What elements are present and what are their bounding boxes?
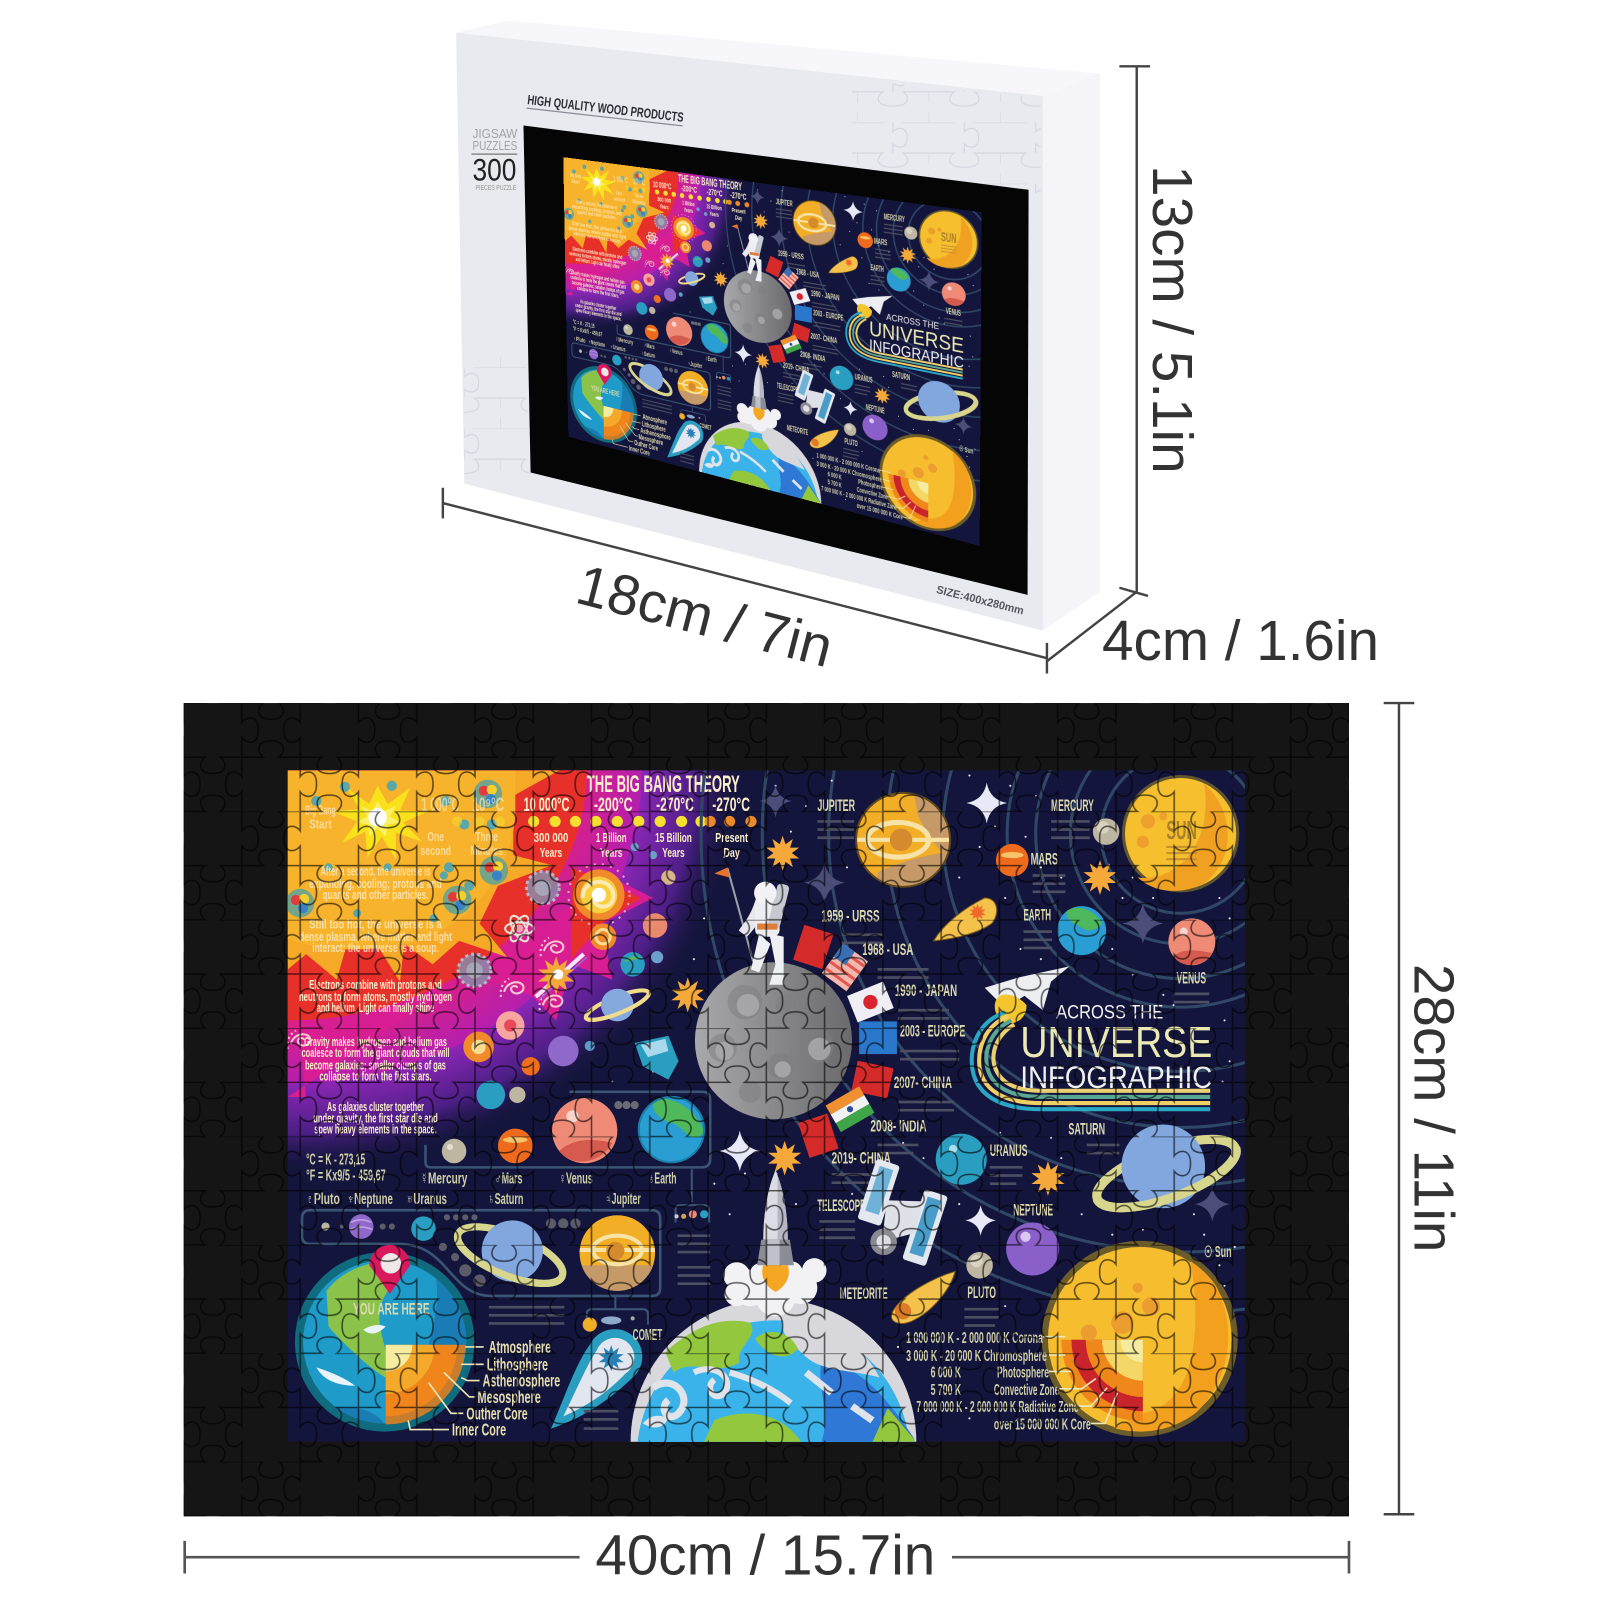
planet symbols legend: ♆Neptune	[347, 1191, 393, 1208]
sun with label	[1123, 777, 1238, 891]
planet: pluto small	[321, 1222, 330, 1231]
box piece count: PIECES PUZZLE	[476, 184, 517, 192]
temperatures row	[421, 794, 750, 816]
black picture panel on box	[523, 126, 1029, 595]
timeline labels: 1 Billion	[596, 830, 627, 845]
planet: saturn	[451, 1215, 570, 1295]
big bang explanatory text: spew heavy elements in the space.	[314, 1122, 437, 1137]
moon with craters	[695, 962, 852, 1119]
temperature conversion note: °C = K - 273,15	[306, 1151, 366, 1168]
temperatures row: -200°C	[594, 794, 633, 816]
dimension: box height	[1119, 66, 1203, 596]
timeline labels: Years	[600, 845, 622, 860]
atoms, nebulae and galaxies	[286, 780, 563, 1049]
big earth horizon	[631, 1299, 916, 1594]
meteor	[934, 898, 997, 941]
box front face	[456, 33, 1043, 631]
dimension: puzzle width: 40cm / 15.7in	[595, 1524, 935, 1587]
pluto with label: PLUTO	[967, 1284, 996, 1302]
icon: crystal asteroid	[635, 1036, 679, 1080]
timeline labels: Day	[723, 845, 740, 860]
sun symbol label: ☉ Sun	[1204, 1244, 1232, 1261]
venus with label: VENUS	[1177, 970, 1206, 988]
big bang explanatory text	[299, 864, 452, 1137]
asteroids	[614, 1101, 639, 1109]
sun layers labels: over 15 000 000 K Core	[994, 1417, 1091, 1434]
big bang explanatory text: After a second, the universe is	[320, 864, 431, 879]
dimension: puzzle width	[185, 1524, 1349, 1587]
space shuttle	[985, 966, 1069, 1023]
earth core cutaway	[386, 1345, 465, 1424]
box piece count: 300	[472, 152, 516, 188]
dimension: box depth	[1047, 592, 1379, 673]
planet: mars	[498, 1129, 533, 1163]
timeline labels: Three	[476, 829, 498, 844]
sun layers labels: 7 000 000 K - 2 000 000 K Radiative Zone	[916, 1399, 1079, 1416]
big bang explanatory text: coalesce to form the giant clouds that will	[302, 1045, 449, 1060]
planet: earth	[639, 1097, 704, 1162]
big bang explanatory text: dense plasma, where matter and light	[299, 929, 452, 944]
planet symbols legend: ☿Mercury	[420, 1171, 468, 1188]
moon mission labels	[821, 907, 965, 1183]
moon mission labels: 1959 - URSS	[821, 907, 880, 925]
supernova burst	[536, 954, 587, 1000]
timeline labels: One	[428, 829, 444, 844]
temperature and timeline heading	[305, 771, 757, 860]
dimension: puzzle height: 28cm / 11in	[1401, 964, 1464, 1252]
earth layers labels: Outher Core	[466, 1403, 528, 1423]
you are here earth	[295, 1245, 474, 1432]
comet	[551, 1327, 663, 1429]
product box	[456, 20, 1100, 631]
location pin	[369, 1245, 410, 1294]
flag: ussr	[793, 925, 833, 969]
earth layers labels: Mesosphere	[478, 1387, 541, 1407]
mars	[996, 844, 1065, 892]
sun layers labels: 3 000 K - 20 000 K Chromosphere	[906, 1348, 1047, 1365]
rocket launch	[723, 1170, 827, 1316]
timeline labels: Start	[309, 817, 332, 832]
sun layers labels	[906, 1330, 1117, 1434]
earth small with label: EARTH	[1023, 906, 1051, 924]
rainbow trail	[972, 1012, 1210, 1109]
timeline labels: Minutes	[470, 843, 503, 858]
moon mission labels: 2007- CHINA	[894, 1074, 952, 1092]
planet symbols legend: ♄Saturn	[488, 1191, 523, 1208]
planet symbols legend: ♃Jupiter	[605, 1191, 641, 1208]
box size note: SIZE:400x280mm	[935, 584, 1025, 617]
timeline labels: Years	[540, 845, 562, 860]
moon mission labels: 2003 - EUROPE	[900, 1023, 965, 1041]
meteorite with label: METEORITE	[840, 1285, 888, 1303]
temperatures row: 10 000°C	[523, 794, 569, 816]
poster artwork	[288, 157, 1245, 1442]
big bang explanatory text: expanding, cooling; protons and	[309, 876, 442, 891]
box piece count: JIGSAW	[472, 126, 518, 141]
planet: venus	[552, 1098, 617, 1163]
mars: MARS	[1031, 850, 1058, 868]
sun cutaway large	[1045, 1244, 1235, 1434]
box brand line: HIGH QUALITY WOOD PRODUCTS	[527, 92, 685, 125]
faint puzzle outlines on box	[464, 80, 1041, 482]
big bang explanatory text: interact: the universe is a soup.	[312, 940, 439, 955]
uranus with label	[936, 1134, 1028, 1185]
telescope satellite	[817, 1158, 953, 1266]
jupiter label: JUPITER	[817, 797, 855, 815]
box brand line	[527, 92, 685, 126]
small planets in the cosmic timeline	[477, 843, 676, 1109]
pluto with label	[964, 1252, 999, 1326]
earth layers labels: Lithosphere	[487, 1354, 548, 1374]
outer planets box	[302, 1169, 710, 1332]
sun layers labels: 1 000 000 K - 2 000 000 K Corona	[906, 1330, 1043, 1347]
meteorite with label	[840, 1271, 955, 1323]
temperatures row: -270°C	[712, 794, 750, 816]
orbit dots	[340, 1214, 581, 1287]
neptune with label	[1006, 1201, 1059, 1276]
smoke cloud	[723, 1258, 827, 1316]
saturn large with label	[1068, 1121, 1244, 1222]
earth layers labels: Atmosphere	[489, 1337, 551, 1357]
earth layers labels	[408, 1337, 560, 1440]
planet symbols legend: ♁Earth	[648, 1171, 677, 1188]
comet: COMET	[633, 1327, 663, 1344]
timeline labels: 300 000	[534, 830, 568, 845]
earth small with label	[1023, 906, 1106, 955]
planet symbols legend: ♅Uranus	[406, 1191, 447, 1208]
sun layers labels: 6 000 K	[931, 1365, 961, 1382]
timeline labels: Years	[662, 845, 685, 860]
jigsaw piece cut lines	[184, 703, 1349, 1516]
sun layers labels: 5 700 K	[931, 1382, 961, 1399]
jupiter label	[817, 797, 855, 838]
spiral galaxy	[463, 864, 630, 1062]
planet symbols legend: ♂Mars	[495, 1171, 522, 1188]
title: the big bang theory: THE BIG BANG THEORY	[587, 771, 740, 798]
box right face	[1043, 73, 1100, 631]
temperature conversion note: °F = Kx9/5 - 459,67	[306, 1168, 386, 1185]
flag: india	[826, 1086, 874, 1132]
assembled puzzle board	[184, 703, 1349, 1516]
box top face	[456, 20, 1100, 96]
panel: big bang expanding background	[288, 157, 736, 1160]
box piece count	[471, 126, 518, 192]
title line 1: ACROSS THE	[1056, 1001, 1163, 1023]
timeline dots	[452, 816, 757, 827]
big bang explanatory text: collapse to form the first stars.	[319, 1069, 432, 1084]
astronaut with flag	[714, 867, 790, 985]
telescope satellite: TELESCOPE	[817, 1197, 865, 1215]
dimension: box depth: 4cm / 1.6in	[1102, 610, 1379, 673]
moon mission labels: 1990 - JAPAN	[895, 982, 957, 1000]
moon mission labels: 1968 - USA	[862, 941, 913, 959]
planet: jupiter large	[855, 791, 954, 898]
title line 3: INFOGRAPHIC	[1020, 1059, 1212, 1095]
planet symbols legend	[306, 1171, 677, 1208]
moon mission labels: 2019- CHINA	[832, 1149, 891, 1167]
flag: china 2019	[798, 1114, 839, 1158]
sun with label: SUN	[1166, 817, 1197, 845]
text lines: saturn notes	[489, 1307, 564, 1323]
sun layers labels: Photosphere	[997, 1365, 1049, 1382]
big bang explanatory text: Still too hot, the universe is a	[309, 917, 442, 932]
timeline labels: second	[420, 843, 451, 858]
planet: mercury	[442, 1139, 466, 1163]
flag: japan	[847, 982, 894, 1023]
flag: china	[851, 1061, 894, 1098]
flags of space nations	[793, 925, 897, 1158]
asteroid belt bracket	[583, 1296, 648, 1332]
orange burst stars	[671, 836, 1117, 1196]
title: across the universe infographic	[972, 1001, 1212, 1109]
big bang explanatory text: As galaxies cluster together	[327, 1099, 424, 1114]
dimension: box height: 13cm / 5.1in	[1140, 165, 1203, 474]
dimension: puzzle height	[1384, 703, 1464, 1514]
timeline labels: Big Bang	[305, 802, 336, 817]
temperatures row: 1 000°C	[421, 794, 459, 816]
mercury: MERCURY	[1051, 797, 1094, 815]
planet: uranus small	[411, 1216, 436, 1241]
earth layers labels: Asthenosphere	[483, 1371, 560, 1391]
dimension: box width: 18cm / 7in	[570, 554, 839, 680]
planet symbols legend: ♇Pluto	[306, 1191, 340, 1208]
planet: neptune small	[349, 1214, 373, 1239]
temperatures row: -270°C	[656, 794, 694, 816]
box piece count: PUZZLES	[472, 138, 517, 153]
timeline labels: Present	[715, 830, 748, 845]
flag: europe	[859, 1021, 897, 1054]
big bang explanatory text: under gravity, the first star die and	[313, 1110, 438, 1125]
decorative four point stars	[719, 783, 1230, 1236]
sun layers labels: Convective Zone	[994, 1382, 1059, 1399]
big bang explanatory text: and helium. Light can finally shine	[317, 1000, 434, 1015]
orbit rings	[668, 178, 1245, 1312]
title line 2: UNIVERSE	[1020, 1018, 1212, 1067]
background stars	[612, 776, 1235, 1418]
temperature conversion note	[306, 1151, 386, 1185]
rocket flame	[762, 1265, 789, 1292]
neptune with label: NEPTUNE	[1013, 1201, 1053, 1219]
you are here label: YOU ARE HERE	[353, 1300, 430, 1318]
timeline labels	[305, 802, 748, 860]
uranus with label: URANUS	[990, 1142, 1028, 1160]
mercury	[1051, 797, 1119, 845]
saturn large with label: SATURN	[1068, 1121, 1105, 1139]
flag: usa	[822, 943, 868, 991]
earth layers labels: Inner Core	[452, 1420, 506, 1440]
mini poster printed on the box	[564, 157, 982, 546]
bracket to rocks	[674, 1169, 710, 1284]
inner planets box	[426, 1092, 710, 1167]
temperatures row: 10⁹°C	[472, 794, 504, 816]
big bang explanatory text: Electrons combine with protons and	[309, 977, 442, 992]
timeline labels: 15 Billion	[655, 830, 692, 845]
decorative particles	[311, 781, 497, 922]
dimension: box width	[443, 488, 1047, 680]
big bang explanatory text: quarks and other particles.	[322, 887, 429, 902]
big bang explanatory text: neutrons to form atoms, mostly hydrogen	[299, 989, 452, 1004]
planet symbols legend: ♀Venus	[559, 1171, 593, 1188]
big bang explanatory text: become galaxies; smaller clumps of gas	[305, 1057, 446, 1072]
venus with label	[1168, 918, 1215, 1002]
moon mission labels: 2008- INDIA	[870, 1118, 927, 1136]
big bang explanatory text: Gravity makes hydrogen and helium gas	[304, 1034, 447, 1049]
rocket body	[757, 1170, 794, 1265]
planet: jupiter	[580, 1215, 655, 1296]
